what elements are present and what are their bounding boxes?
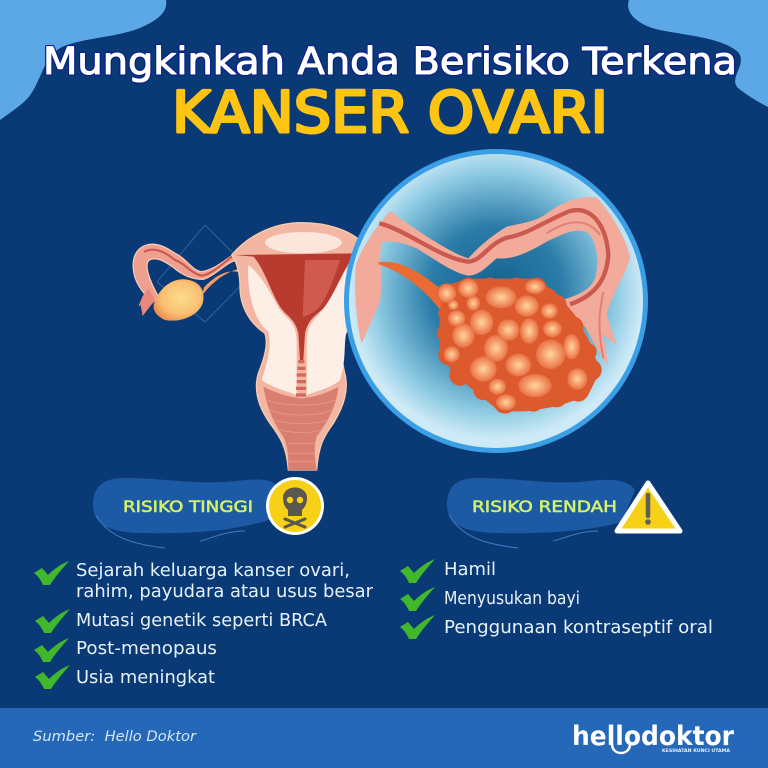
decorative blob: top left: [0, 0, 166, 120]
cavity lighter lobe: [303, 260, 340, 317]
badge: risiko tinggi: RISIKO TINGGI: [123, 497, 253, 516]
vagina: [263, 387, 338, 470]
tube pale stripe: [547, 222, 603, 358]
vaginal folds: [267, 400, 335, 462]
diamond outline: [157, 225, 253, 322]
list: risiko tinggi: [34, 561, 374, 689]
illustration: uterus: [133, 223, 363, 470]
source: Sumber: Hello Doktor: [33, 729, 197, 745]
list: risiko tinggi: rahim, payudara atau usus besar: [76, 582, 374, 602]
footer bar: [0, 708, 768, 768]
cervical canal: [296, 360, 306, 397]
left fallopian tube: [133, 244, 238, 303]
title: Mungkinkah Anda Berisiko Terkena: [43, 40, 737, 83]
icon: warning triangle: [617, 483, 680, 531]
list: risiko tinggi: Post-menopaus: [76, 639, 217, 659]
list: risiko rendah: Hamil: [444, 560, 496, 580]
list: risiko tinggi: Mutasi genetik seperti BRCA: [76, 611, 327, 631]
badge: risiko rendah: [447, 478, 680, 548]
ovarian ligament: [202, 269, 239, 296]
logo: hellodoktor: KESIHATAN KUNCI UTAMA: [662, 748, 730, 754]
icon: skull: [266, 477, 324, 535]
zoomed fallopian tube: [355, 197, 630, 367]
orange ligament: [378, 262, 442, 312]
magnified circle: [344, 149, 648, 453]
title: KANSER OVARI: [172, 80, 608, 146]
right tissue: [307, 267, 353, 395]
list: risiko rendah: Penggunaan kontraseptif oral: [444, 618, 713, 638]
list: risiko rendah: Menyusukan bayi: [444, 589, 580, 609]
uterine cavity: [235, 253, 353, 360]
fimbriae: [138, 288, 155, 316]
tumour lumps: [437, 279, 587, 410]
uterus body: [232, 223, 363, 470]
fundus highlight: [265, 232, 342, 253]
logo: hellodoktor: hellodoktor: [572, 721, 735, 752]
list: risiko tinggi: Sejarah keluarga kanser ovari,: [76, 561, 350, 581]
badge: risiko tinggi: [93, 477, 324, 548]
list: risiko tinggi: Usia meningkat: [76, 668, 215, 688]
list: risiko rendah: [400, 559, 713, 639]
left ovary: [154, 279, 204, 321]
tube inner channel: [379, 210, 608, 304]
title: Mungkinkah Anda Berisiko Terkena: [43, 40, 737, 83]
decorative blob: top right: [628, 0, 768, 107]
badge: risiko rendah: RISIKO RENDAH: [472, 497, 617, 516]
title: [43, 40, 737, 146]
tube inner line: [144, 250, 233, 276]
left tissue: [248, 265, 297, 395]
tumour mass: [437, 278, 602, 414]
